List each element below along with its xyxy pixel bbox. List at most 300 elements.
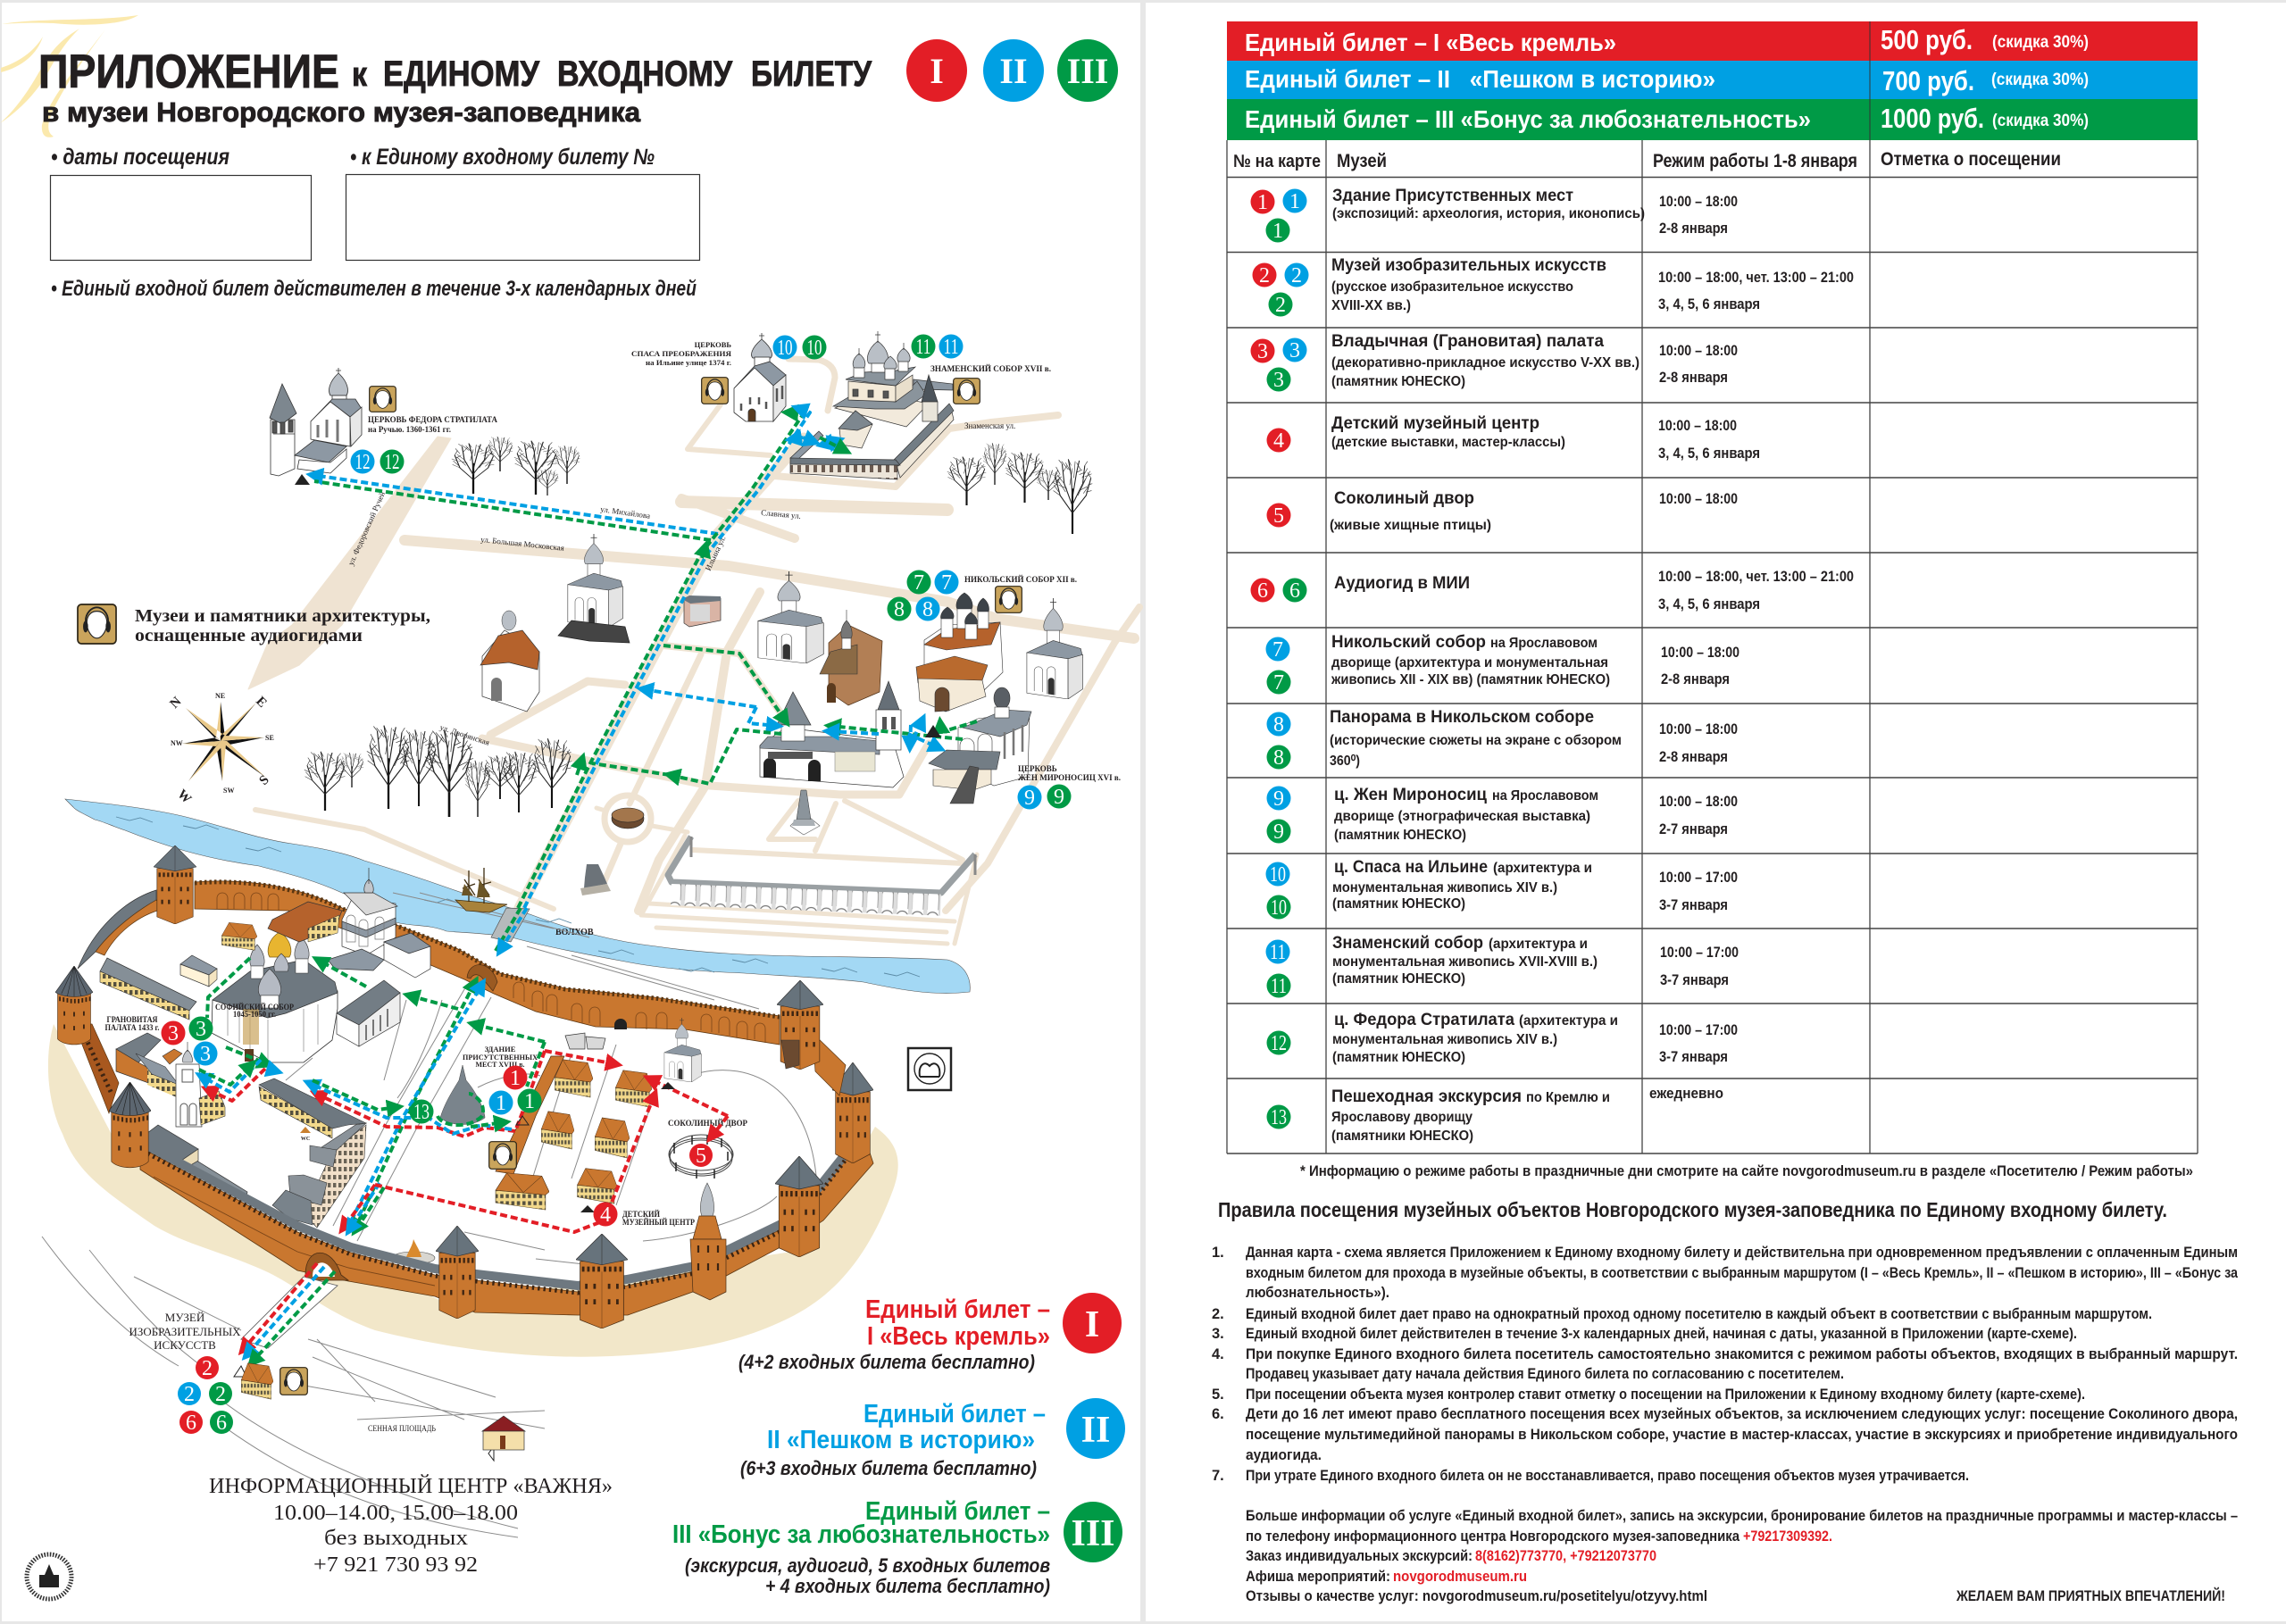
label: Fedor: на Ручью. 1360-1361 гг.	[368, 425, 451, 434]
rules list: посещение мультимедийной панорамы в Никольском соборе, участие в мастер-классах, участие в экскурсиях и приобретение индивидуального	[1246, 1427, 2238, 1443]
rules list: Единый входной билет дает право на однократный проход одному посетителю в каждый объект в соответствии с выбранным маршрутом.	[1246, 1306, 2152, 1322]
table header: № на карте	[1233, 152, 1321, 171]
river ripples	[116, 817, 920, 977]
spire tower	[922, 375, 938, 402]
monastery walls	[896, 408, 954, 478]
table map numbers: 2	[1291, 264, 1302, 287]
river label: ВОЛХОВ	[555, 928, 594, 937]
label: sofia: СОФИЙСКИЙ СОБОР	[215, 1003, 294, 1012]
table museum names: ц. Спаса на Ильине	[1334, 857, 1488, 877]
table museum names: (декоративно-прикладное искусство V-XX вв.)	[1331, 355, 1639, 371]
visit date field: • даты посещения	[51, 145, 229, 170]
kremlin back wall	[195, 881, 780, 1045]
price table bands	[1227, 21, 2198, 140]
table opening hours: 3, 4, 5, 6 января	[1658, 296, 1760, 312]
route legend I: I	[1085, 1304, 1099, 1345]
table opening hours: 10:00 – 18:00	[1661, 644, 1740, 661]
church: Fedor Stratilat	[270, 368, 362, 476]
label: presence offices: ПРИСУТСТВЕННЫХ	[463, 1053, 538, 1062]
houses	[565, 1033, 652, 1203]
contact information: +79217309392.	[1743, 1528, 1832, 1545]
table map numbers: 6	[1289, 579, 1300, 603]
table opening hours: 3-7 января	[1659, 896, 1728, 913]
label: children's centre	[622, 1210, 695, 1227]
location badges: 8	[894, 598, 905, 621]
table museum names: на Ярославовом	[1490, 636, 1598, 651]
route legend I: I «Весь кремль»	[867, 1322, 1050, 1351]
rules list: При покупке Единого входного билета посетитель самостоятельно знакомится с режимом работы объектов, входящих в выбранный маршрут.	[1246, 1346, 2238, 1362]
price table bands: 500 руб.	[1881, 24, 1973, 55]
table map numbers: 7	[1272, 638, 1283, 662]
rules list: При посещении объекта музея контролер ставит отметку о посещении на Приложении к Единому входному билету (карте-схеме).	[1246, 1387, 2085, 1403]
table museum names: (памятник ЮНЕСКО)	[1332, 1050, 1465, 1065]
church gray roof	[758, 571, 823, 663]
table museum names: (исторические сюжеты на экране с обзором	[1330, 733, 1622, 748]
rules heading: Правила посещения музейных объектов Новгородского музея-заповедника по Единому входному билету.	[1218, 1198, 2167, 1221]
table opening hours: 2-8 января	[1661, 670, 1730, 687]
location badges: 13	[413, 1101, 430, 1124]
route legend III: Единый билет –	[865, 1497, 1050, 1526]
contact information: 8(8162)773770, +79212073770	[1475, 1548, 1656, 1564]
label: granovitaya: ПАЛАТА 1433 г.	[105, 1023, 159, 1032]
route: kremlin main road	[355, 982, 475, 1230]
rules list: 2.	[1212, 1306, 1224, 1322]
label: Fedor: ЦЕРКОВЬ ФЕДОРА СТРАТИЛАТА	[368, 415, 497, 424]
table museum names: (памятник ЮНЕСКО)	[1331, 374, 1465, 389]
street names	[346, 421, 1015, 747]
rules list: 5.	[1212, 1387, 1224, 1403]
table map numbers: 2	[1259, 264, 1270, 287]
table map numbers: 5	[1273, 504, 1284, 528]
price table bands: Единый билет – I «Весь кремль»	[1245, 29, 1616, 56]
location badges: 6	[216, 1412, 227, 1435]
decorative gold swash	[0, 15, 138, 137]
footnote: * Информацию о режиме работы в праздничные дни смотрите на сайте novgorodmuseum.ru в разделе «Посетителю / Режим работы»	[1300, 1162, 2193, 1179]
table opening hours: 10:00 – 17:00	[1660, 944, 1739, 961]
location badges: 7	[914, 571, 924, 595]
label: Spas: на Ильине улице 1374 г.	[646, 358, 731, 367]
clock tower	[176, 1042, 225, 1127]
table museum names: Детский музейный центр	[1331, 413, 1539, 433]
label: Spas: ЦЕРКОВЬ	[695, 340, 731, 349]
information centre: без выходных	[324, 1527, 468, 1550]
wall-side building	[140, 1125, 247, 1201]
table museum names: (архитектура и	[1493, 861, 1592, 876]
UNESCO emblem	[908, 1048, 951, 1090]
river Volkhov	[65, 799, 970, 994]
location badges: 10	[807, 337, 822, 360]
table museum names: (памятник ЮНЕСКО)	[1334, 828, 1466, 843]
table opening hours: 2-7 января	[1659, 820, 1728, 837]
beige ground around kremlin	[48, 1024, 898, 1357]
location badges: 2	[202, 1357, 213, 1380]
street names: ул. Михайлова	[600, 504, 651, 521]
rules list: 7.	[1212, 1468, 1224, 1484]
kremlin front wall	[140, 1131, 873, 1315]
route legend II	[740, 1398, 1125, 1479]
contact information: novgorodmuseum.ru	[1393, 1569, 1527, 1585]
table opening hours: 3-7 января	[1659, 1048, 1728, 1065]
table header: Режим работы 1-8 января	[1653, 151, 1857, 171]
table museum names: по Кремлю и	[1526, 1090, 1610, 1105]
front porch	[839, 411, 872, 448]
table museum names: дворище (этнографическая выставка)	[1334, 809, 1590, 824]
table map numbers: 3	[1289, 339, 1300, 362]
table museum names	[1330, 186, 1645, 1144]
long gallery	[100, 958, 196, 1020]
information centre	[209, 1475, 613, 1577]
label: fine arts: ИСКУССТВ	[154, 1338, 216, 1352]
location badges: 12	[355, 451, 370, 474]
table opening hours: 10:00 – 18:00	[1659, 793, 1738, 810]
small church	[664, 1018, 701, 1082]
label: presence offices	[463, 1045, 538, 1069]
table map numbers: 4	[1273, 429, 1284, 453]
compass rose: NE	[215, 692, 225, 700]
label: granovitaya	[105, 1015, 159, 1032]
table map numbers: 6	[1257, 579, 1268, 603]
route: green kremlin loop	[313, 1080, 397, 1110]
audio guide legend: оснащенные аудиогидами	[135, 626, 363, 645]
church right white	[1027, 598, 1083, 699]
audio icon: Spas	[702, 378, 728, 404]
location badges: 1	[496, 1092, 506, 1115]
label: hay square: СЕННАЯ ПЛОЩАДЬ	[368, 1425, 436, 1434]
street network	[248, 359, 1139, 944]
title: ВХОДНОМУ	[557, 54, 733, 94]
table opening hours: 10:00 – 18:00	[1659, 490, 1738, 507]
audio icon: Znamensky	[954, 379, 980, 404]
trees	[305, 437, 1092, 817]
information centre: +7 921 730 93 92	[313, 1553, 478, 1577]
falconry arena	[669, 1135, 733, 1178]
street names: Знаменская ул.	[964, 421, 1015, 430]
brown church	[820, 610, 882, 705]
compass rose: N	[168, 695, 185, 712]
museum of fine arts building	[241, 1363, 273, 1399]
table map numbers: 9	[1273, 820, 1284, 844]
route badges: II	[999, 51, 1028, 91]
audio guide legend	[78, 604, 430, 645]
table museum names: Владычная (Грановитая) палата	[1331, 331, 1604, 351]
compass rose: S	[257, 773, 272, 788]
table opening hours: 2-8 января	[1659, 369, 1728, 386]
table opening hours: 10:00 – 18:00, чет. 13:00 – 21:00	[1658, 568, 1854, 585]
label: children's centre: ДЕТСКИЙ	[622, 1210, 660, 1219]
table museum names: ц. Федора Стратилата	[1334, 1010, 1514, 1029]
table map numbers: 10	[1270, 863, 1286, 887]
validity note: • Единый входной билет действителен в течение 3-х календарных дней	[51, 277, 697, 301]
znamensky monastery	[790, 331, 954, 479]
route legend I: Единый билет –	[865, 1295, 1050, 1324]
gate church	[558, 534, 630, 643]
table museum names: (экспозиций: археология, история, иконопись)	[1332, 206, 1645, 221]
rules list: Единый входной билет действителен в течение 3-х календарных дней, начиная с даты, указанной в Приложении (карте-схеме).	[1246, 1326, 2077, 1342]
route legend II: (6+3 входных билета бесплатно)	[740, 1457, 1037, 1479]
millennium monument	[440, 1065, 485, 1125]
audio icon: Fedor	[370, 387, 396, 412]
label: fine arts	[129, 1311, 241, 1352]
towers	[55, 845, 873, 1328]
contact information	[1246, 1508, 2238, 1604]
table opening hours: 10:00 – 18:00	[1658, 417, 1737, 434]
label: falconry: СОКОЛИНЫЙ ДВОР	[668, 1119, 747, 1128]
location badges: 1	[510, 1067, 521, 1090]
route legend II: II	[1081, 1410, 1110, 1451]
neoclassical hall	[337, 980, 400, 1046]
label: fine arts: МУЗЕЙ	[165, 1311, 204, 1324]
route legend II: II «Пешком в историю»	[767, 1426, 1035, 1454]
table opening hours	[1649, 193, 1854, 1102]
rules list: 6.	[1212, 1406, 1224, 1422]
rules list: 3.	[1212, 1326, 1224, 1342]
table museum names: XVIII-XX вв.)	[1331, 298, 1411, 313]
audio guide legend: Музеи и памятники архитектуры,	[135, 606, 430, 626]
price table bands: Единый билет – III «Бонус за любознательность»	[1245, 105, 1811, 133]
route badges: I	[930, 51, 944, 91]
price table bands: 700 руб.	[1882, 65, 1974, 96]
rules list: 4.	[1212, 1346, 1224, 1362]
contact information: Афиша мероприятий:	[1246, 1569, 1390, 1585]
obelisk	[790, 790, 820, 835]
table museum names: (живые хищные птицы)	[1330, 518, 1491, 533]
table opening hours: 3-7 января	[1660, 971, 1729, 988]
location badges	[161, 334, 1072, 1435]
label: Spas	[631, 340, 731, 367]
table map numbers: 11	[1270, 941, 1286, 964]
monuments near fountain	[580, 808, 644, 895]
price table bands: (скидка 30%)	[1992, 33, 2089, 52]
label: Fedor	[368, 415, 497, 434]
route badges: III	[1067, 51, 1108, 91]
yaroslav court gate complex	[760, 681, 904, 787]
bridge over river	[491, 908, 530, 942]
table opening hours: ежедневно	[1649, 1085, 1723, 1102]
label: sofia: 1045-1050 гг.	[233, 1010, 276, 1019]
price table bands: (скидка 30%)	[1992, 112, 2089, 130]
table opening hours: 10:00 – 17:00	[1659, 869, 1738, 886]
label: myrrhbearers: ЦЕРКОВЬ	[1018, 764, 1057, 773]
table museum names: (памятник ЮНЕСКО)	[1332, 971, 1465, 987]
rules list: 1.	[1212, 1245, 1224, 1261]
price table bands: Единый билет – II «Пешком в историю»	[1245, 65, 1715, 93]
compass rose: W	[174, 787, 194, 806]
brown-roof church	[480, 611, 539, 712]
street names: ул. Дворянская	[438, 722, 490, 747]
rules list: При утрате Единого входного билета он не восстанавливается, право посещения объектов музея утрачивается.	[1246, 1468, 1969, 1484]
icon: audio guide	[78, 604, 116, 644]
location badges: 8	[922, 598, 933, 621]
route legend I	[738, 1293, 1122, 1373]
location badges: 1	[524, 1090, 535, 1113]
map	[42, 331, 1139, 1537]
table header: Отметка о посещении	[1881, 149, 2061, 170]
location badges: 6	[186, 1412, 196, 1435]
table opening hours: 3, 4, 5, 6 января	[1658, 445, 1760, 462]
table museum names: монументальная живопись XIV в.)	[1332, 1032, 1557, 1047]
route: to fedor stratilat	[313, 475, 718, 534]
route legend III: (экскурсия, аудиогид, 5 входных билетов	[685, 1554, 1050, 1577]
sofia cathedral	[212, 929, 338, 1062]
bishop's court	[221, 902, 342, 950]
table museum names: 360⁰)	[1330, 754, 1360, 769]
table map numbers: 1	[1257, 191, 1268, 214]
table museum names: Панорама в Никольском соборе	[1330, 707, 1594, 727]
table map numbers: 8	[1273, 746, 1284, 770]
information centre: ИНФОРМАЦИОННЫЙ ЦЕНТР «ВАЖНЯ»	[209, 1475, 613, 1498]
location badges: 12	[384, 451, 400, 474]
location badges: 3	[168, 1022, 179, 1045]
route legend III: III	[1071, 1513, 1115, 1554]
location badges: 9	[1054, 786, 1064, 809]
label: presence offices: МЕСТ XVIII в.	[475, 1060, 525, 1069]
table museum names: Музей изобразительных искусств	[1331, 255, 1606, 275]
title: к	[352, 56, 368, 94]
table museum names: Никольский собор	[1331, 632, 1486, 652]
street names: ул. Федоровский Ручей	[346, 490, 387, 567]
label: sofia	[215, 1003, 294, 1019]
table museum names: Соколиный двор	[1334, 488, 1474, 508]
label: Nikolsky: НИКОЛЬСКИЙ СОБОР XII в.	[964, 575, 1077, 584]
street names: ул. Большая Московская	[480, 535, 564, 553]
table museum names: ц. Жен Мироносиц	[1334, 785, 1487, 804]
rules list: аудиогида.	[1246, 1447, 1322, 1463]
title: в музеи Новгородского музея-заповедника	[42, 96, 641, 128]
rules list: любознательность»).	[1246, 1285, 1389, 1301]
title: БИЛЕТУ	[751, 54, 872, 94]
location badges: 2	[184, 1383, 195, 1406]
table map numbers: 13	[1271, 1106, 1287, 1129]
domes	[854, 366, 864, 378]
label: presence offices: ЗДАНИЕ	[485, 1045, 516, 1054]
location badges: 4	[600, 1203, 611, 1227]
table opening hours: 10:00 – 18:00	[1659, 342, 1738, 359]
title	[38, 46, 872, 128]
table map numbers: 3	[1273, 369, 1284, 392]
route: blue kremlin loop	[309, 1083, 512, 1134]
audio icon: presence offices	[489, 1142, 516, 1169]
contact information: Отзывы о качестве услуг: novgorodmuseum.ru/posetitelyu/otzyvy.html	[1246, 1588, 1707, 1604]
compass rose	[168, 692, 274, 806]
audio icon: fine arts	[280, 1368, 307, 1395]
belfry	[328, 868, 430, 978]
contact information: по телефону информационного центра Новгородского музея-заповедника	[1246, 1528, 1740, 1545]
table map numbers: 10	[1271, 896, 1287, 920]
church: Spas on Ilyina	[734, 333, 786, 421]
flame memorial	[392, 1239, 435, 1264]
location badges: 9	[1024, 787, 1035, 810]
information centre: 10.00–14.00, 15.00–18.00	[273, 1502, 518, 1525]
table museum names: Знаменский собор	[1332, 933, 1483, 953]
title: ПРИЛОЖЕНИЕ	[38, 46, 339, 98]
nikolsky cathedral	[916, 593, 1003, 712]
route legend III	[672, 1497, 1122, 1597]
table museum names: (памятник ЮНЕСКО)	[1332, 896, 1465, 912]
thin ground lines	[42, 893, 817, 1537]
L-shaped building row	[259, 1079, 366, 1228]
wc sign: WC	[301, 1137, 310, 1142]
table opening hours: 2-8 января	[1659, 748, 1728, 765]
table map numbers: 2	[1275, 294, 1286, 317]
location badges: 7	[941, 571, 952, 595]
route legend I: (4+2 входных билета бесплатно)	[738, 1351, 1035, 1373]
wc sign	[300, 1127, 311, 1142]
label: myrrhbearers	[1018, 764, 1121, 782]
cathedral upper body	[848, 381, 896, 402]
kiosk	[682, 595, 721, 627]
table museum names: монументальная живопись XVII-XVIII в.)	[1332, 954, 1598, 970]
closing wish: ЖЕЛАЕМ ВАМ ПРИЯТНЫХ ВПЕЧАТЛЕНИЙ!	[1956, 1587, 2225, 1604]
price table bands: (скидка 30%)	[1991, 71, 2089, 89]
street names: Славная ул.	[761, 508, 801, 521]
title: ЕДИНОМУ	[383, 54, 540, 94]
location badges: 11	[916, 336, 930, 359]
table map numbers: 11	[1271, 975, 1287, 998]
audio icon: Nikolsky	[996, 587, 1022, 612]
museum logo	[27, 1554, 71, 1599]
table museum names: Аудиогид в МИИ	[1334, 573, 1470, 593]
ticket number field: • к Единому входному билету №	[350, 145, 655, 170]
info kiosk	[482, 1416, 525, 1450]
table museum names: (архитектура и	[1489, 937, 1588, 952]
route legend III: + 4 входных билета бесплатно)	[765, 1575, 1050, 1597]
table map numbers	[1250, 189, 1309, 1129]
table museum names: Пешеходная экскурсия	[1331, 1087, 1522, 1106]
table map numbers: 12	[1271, 1032, 1287, 1055]
table header: Музей	[1337, 151, 1387, 171]
visit date field	[50, 145, 311, 261]
location badges: 11	[943, 336, 959, 359]
route: river crossing	[496, 908, 521, 951]
rules list	[1212, 1245, 2239, 1484]
label: Znamensky: ЗНАМЕНСКИЙ СОБОР XVII в.	[930, 364, 1051, 373]
price table bands: 1000 руб.	[1881, 103, 1984, 134]
route legend II: Единый билет –	[864, 1400, 1046, 1428]
ticket number field	[346, 145, 700, 261]
location badges: 2	[215, 1383, 226, 1406]
route legend III: III «Бонус за любознательность»	[672, 1520, 1050, 1549]
table museum names: (архитектура и	[1519, 1013, 1618, 1029]
compass rose: SE	[265, 734, 274, 742]
location badges: 3	[196, 1018, 206, 1041]
table map numbers: 7	[1273, 671, 1284, 695]
table map numbers: 9	[1273, 787, 1284, 811]
south bridge	[241, 1277, 338, 1348]
table museum names: (русское изобразительное искусство	[1331, 279, 1573, 295]
table museum names: Ярославову дворищу	[1331, 1110, 1473, 1125]
presence offices building	[496, 1056, 593, 1210]
table opening hours: 3, 4, 5, 6 января	[1658, 595, 1760, 612]
table museum names: (памятники ЮНЕСКО)	[1331, 1128, 1473, 1144]
label: myrrhbearers: ЖЕН МИРОНОСИЦ XVI в.	[1018, 773, 1121, 782]
label: granovitaya: ГРАНОВИТАЯ	[107, 1015, 158, 1024]
location badges: 10	[777, 337, 793, 360]
table opening hours: 10:00 – 18:00	[1659, 193, 1738, 210]
table museum names: дворище (архитектура и монументальная	[1331, 655, 1608, 670]
compass rose: NW	[171, 739, 183, 747]
entrance markers	[234, 474, 941, 1461]
table header	[1233, 149, 2061, 171]
table opening hours: 10:00 – 17:00	[1659, 1021, 1738, 1038]
label: children's centre: МУЗЕЙНЫЙ ЦЕНТР	[622, 1218, 695, 1227]
rules list: Дети до 16 лет имеют право бесплатного посещения всех музейных объектов, за исключением следующих услуг: посещение Соколиного двора,	[1246, 1406, 2238, 1422]
location badges: 3	[200, 1043, 211, 1066]
table map numbers: 1	[1272, 220, 1283, 243]
grey house	[180, 955, 217, 987]
route: museum of fine arts	[243, 1263, 317, 1350]
table museum names: монументальная живопись XIV в.)	[1332, 880, 1557, 895]
south gate arch	[304, 1253, 348, 1280]
